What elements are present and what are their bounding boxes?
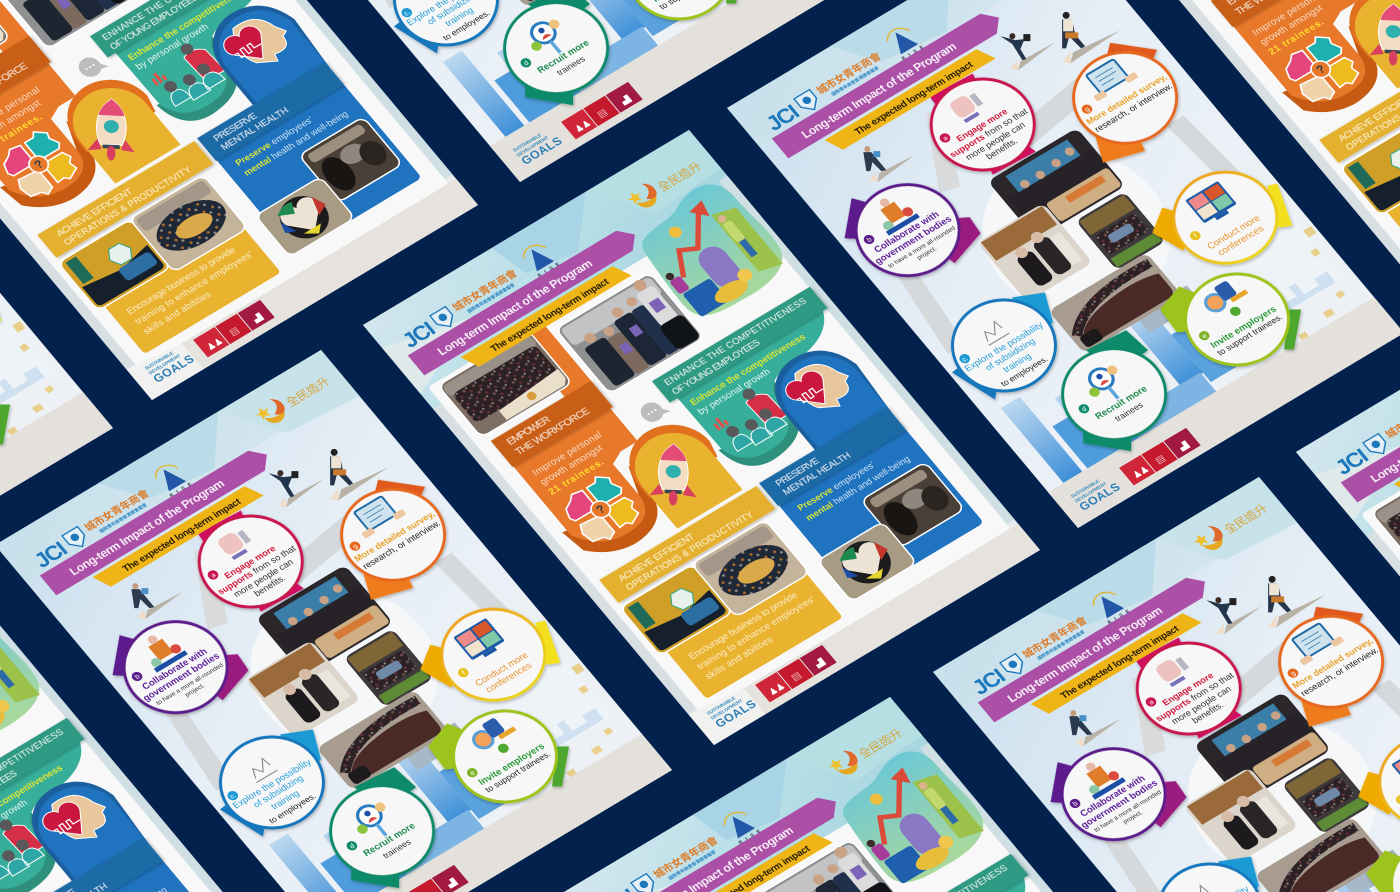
circle d: recruit: trainees xyxy=(1112,400,1145,423)
poster copy: lower right xyxy=(917,467,1400,892)
header logos: 城市女青年商會 xyxy=(450,267,520,314)
header logos: 國際青年商會香港總會屬會 xyxy=(830,64,881,98)
poster copy: right edge xyxy=(1296,257,1400,872)
photo: team with books xyxy=(555,273,704,394)
circle g: survey xyxy=(1005,1,1245,205)
text: enhance body: by personal growth xyxy=(696,367,773,417)
circle e: invite: to support trainees. xyxy=(1215,312,1285,357)
circle c: explore: Explore the possibility xyxy=(962,320,1045,373)
header logos: 城市女青年商會 xyxy=(814,50,884,97)
text: achieve body: skills and abilities xyxy=(703,634,775,681)
orange strip behind crowd photo xyxy=(515,321,592,398)
circle f: conferences: Conduct more xyxy=(1205,213,1262,251)
achieve label xyxy=(599,486,775,603)
SDG logo and tiles: DEVELOPMENT xyxy=(710,698,744,721)
header logos: JCI xyxy=(397,317,440,352)
poster copy: top centre xyxy=(153,0,862,191)
subtitle band xyxy=(461,262,632,371)
figure: businessman on ramp xyxy=(863,146,914,182)
empower workforce S-curve xyxy=(508,378,742,569)
text: achieve body: Encourage business to provide xyxy=(687,590,799,661)
header logos: JCI xyxy=(761,100,804,135)
building bars xyxy=(991,273,1269,483)
ribbons and ring xyxy=(930,74,1036,175)
preserve label: PRESERVE xyxy=(773,456,822,489)
empower label: EMPOWER xyxy=(505,415,553,448)
SDG logo and tiles: ▟ xyxy=(1177,440,1191,452)
ribbons and ring xyxy=(1061,330,1167,451)
circle f: conferences xyxy=(1100,115,1345,321)
circle g: survey: More detailed survey, xyxy=(1084,72,1169,127)
achieve label: OPERATIONS & PRODUCTIVITY xyxy=(624,509,757,593)
circle b: collaborate: project. xyxy=(916,245,938,262)
photo: heart craft xyxy=(817,522,917,602)
preserve mental health head block xyxy=(757,335,895,455)
circle e: invite: Invite employers xyxy=(1208,304,1278,350)
photo: boardroom table xyxy=(1048,252,1182,354)
white circle behind photos xyxy=(945,121,1208,346)
SDG logo and tiles: ▟ xyxy=(813,657,827,669)
circle a: engage: benefits. xyxy=(984,136,1019,161)
subtitle band: The expected long-term impact xyxy=(489,276,612,354)
poster: long-term impact, centre xyxy=(363,130,1040,745)
SDG logo and tiles xyxy=(1070,426,1201,514)
circle d: recruit: d xyxy=(1081,406,1089,413)
poster A paper and header xyxy=(363,130,1040,745)
photo: crowd group xyxy=(438,331,572,437)
header logos xyxy=(755,0,1074,136)
photo: stage group xyxy=(988,128,1125,239)
icon: people xyxy=(706,381,793,454)
bottom strip xyxy=(1048,297,1400,528)
header logos: 國際青年商會香港總會屬會 xyxy=(466,281,517,315)
SDG logo and tiles: GOALS xyxy=(712,697,759,730)
circle c: explore: of subsidizing xyxy=(983,336,1037,372)
enhance competitiveness S-curve xyxy=(673,307,891,478)
SDG logo and tiles: ▤ xyxy=(1154,454,1168,466)
icon: head with heart xyxy=(777,353,862,424)
SDG logo and tiles: ♟♟ xyxy=(767,681,787,697)
photo: lobby group xyxy=(1075,191,1167,271)
circle f: conferences: f xyxy=(1193,233,1199,240)
poster B paper xyxy=(727,0,1400,528)
empower label: THE WORKFORCE xyxy=(513,406,592,458)
circle g: survey: g xyxy=(1084,106,1092,114)
text: preserve body: Preserve employees’ xyxy=(795,460,877,513)
SDG logo and tiles: ♟♟ xyxy=(1131,464,1151,480)
circle a: engage: Engage more xyxy=(954,107,1010,143)
text: achieve body: training to enhance employees’ xyxy=(695,594,817,671)
enhance label: ENHANCE THE COMPETITIVENESS xyxy=(662,296,808,387)
poster copy: lower left xyxy=(0,340,688,892)
circle b: collaborate: Collaborate with xyxy=(872,209,941,255)
preserve body xyxy=(777,427,984,599)
poster copy: left edge xyxy=(0,561,297,892)
poster: expected impact, upper right xyxy=(711,0,1400,537)
circle c: explore: to employees. xyxy=(999,354,1050,388)
SDG logo and tiles: ▤ xyxy=(790,671,804,683)
circle a: engage: more people can xyxy=(963,120,1027,162)
circle a: engage xyxy=(873,31,1092,217)
figure: running woman on ramp xyxy=(1000,33,1055,70)
circle f: conferences: conferences xyxy=(1215,223,1266,258)
ribbons and ring xyxy=(951,292,1057,399)
title banner: Long-term Impact of the Program xyxy=(435,257,595,358)
circle b: collaborate xyxy=(792,129,1033,331)
icon: speech bubble xyxy=(636,396,672,426)
empower label xyxy=(491,381,613,467)
ribbons and ring xyxy=(1072,43,1178,163)
SDG logo and tiles: SUSTAINABLE xyxy=(706,696,737,717)
title banner: Long-term Impact of the Program xyxy=(799,40,959,141)
SDG logo and tiles: DEVELOPMENT xyxy=(1074,481,1108,504)
photo: dark seminar xyxy=(861,462,965,548)
circle b: collaborate: b xyxy=(866,237,874,244)
photo: two women xyxy=(977,203,1093,302)
subtitle band xyxy=(825,45,996,154)
enhance label: OF YOUNG EMPLOYEES xyxy=(670,338,762,396)
circle c: explore: training xyxy=(1001,351,1033,374)
header logos: RISE xyxy=(536,262,560,278)
text: empower body: growth amongst xyxy=(538,443,605,488)
preserve label xyxy=(759,407,906,506)
enhance label xyxy=(652,287,828,403)
poster copy: top right xyxy=(1083,0,1400,305)
icon: puzzle: ? xyxy=(593,502,608,517)
poster copy: top left xyxy=(0,0,478,400)
title banner xyxy=(408,225,643,375)
circle c: explore xyxy=(891,250,1117,442)
header logos xyxy=(393,152,710,353)
icon: puzzle xyxy=(555,470,646,548)
achieve label: ACHIEVE EFFICIENT xyxy=(616,531,697,584)
circle c: explore: c. xyxy=(961,355,970,363)
text: preserve body: mental health and well-being xyxy=(804,454,912,523)
colour blob with growth chart xyxy=(622,174,798,325)
confetti squares xyxy=(1212,226,1378,366)
circle d: recruit xyxy=(994,288,1235,493)
photo: badge in hand xyxy=(620,564,733,656)
achieve efficiency rocket block xyxy=(619,419,743,529)
circle e: invite: e xyxy=(1201,333,1209,340)
poster copy: bottom centre xyxy=(564,697,1241,892)
ribbons and ring xyxy=(1160,272,1301,366)
poster copy: far left xyxy=(0,0,129,632)
photo: circle workshop xyxy=(691,520,810,617)
preserve label: MENTAL HEALTH xyxy=(781,450,853,498)
circle e: invite xyxy=(1108,216,1353,423)
SDG logo and tiles: SUSTAINABLE xyxy=(1070,479,1101,500)
subtitle band: The expected long-term impact xyxy=(853,59,976,137)
header logos: RISE xyxy=(900,45,924,61)
ribbons and ring xyxy=(1152,171,1292,265)
figure: man with flag on ramp xyxy=(1062,12,1120,63)
yellow box xyxy=(666,569,843,699)
text: empower body: 21 trainees. xyxy=(546,457,607,497)
icon: rocket xyxy=(650,443,697,507)
SDG logo and tiles: GOALS xyxy=(1076,480,1123,513)
circle b: collaborate: government bodies xyxy=(873,214,954,266)
title banner xyxy=(772,8,1007,158)
circle g: survey: research, or interview. xyxy=(1092,81,1174,134)
circle d: recruit: Recruit more xyxy=(1093,384,1149,421)
text: enhance body: Enhance the competitiveness xyxy=(688,332,808,408)
ribbons and ring xyxy=(845,183,981,277)
text: empower body: Improve personal xyxy=(530,430,604,478)
circle a: engage: a xyxy=(942,135,950,142)
SDG logo and tiles xyxy=(706,643,837,731)
circle a: engage: supports from so that xyxy=(947,107,1030,160)
skyline xyxy=(1260,264,1336,318)
header logos: 全民造升 xyxy=(655,159,704,194)
circle b: collaborate: to have a more all-rounded xyxy=(887,225,957,270)
